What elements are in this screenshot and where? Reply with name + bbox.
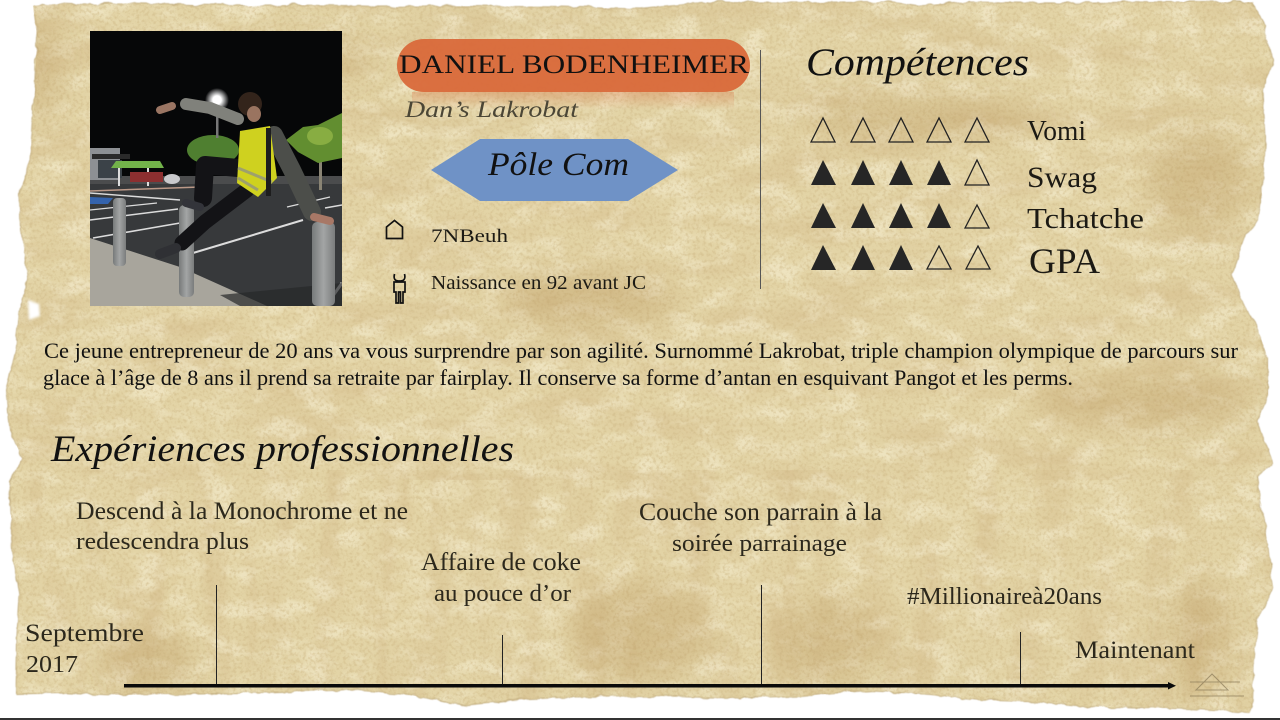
timeline start label: Septembre — [25, 620, 144, 647]
skill rating: Tchatche: Tchatche — [1027, 204, 1144, 235]
timeline start label — [25, 620, 144, 678]
timeline event: Monochrome: Descend à la Monochrome et ne — [76, 498, 408, 525]
icon: person — [394, 274, 405, 303]
bollards — [113, 198, 126, 266]
department badge: Pôle Com — [487, 147, 629, 183]
name badge: DANIEL BODENHEIMER — [399, 50, 750, 79]
icon: house — [386, 220, 402, 238]
heading: skills: Compétences — [806, 41, 1029, 84]
arrow — [124, 682, 1176, 690]
timeline event: Affaire de coke: Affaire de coke — [421, 549, 581, 576]
biography paragraph: Ce jeune entrepreneur de 20 ans va vous surprendre par son agilité. Surnommé Lakrobat, triple champion olympique de parcours sur — [44, 338, 1239, 363]
timeline — [124, 585, 1176, 690]
timeline event: Monochrome: redescendra plus — [76, 529, 249, 555]
birth date: Naissance en 92 avant JC — [431, 272, 646, 294]
ink doodle bottom right — [1190, 674, 1244, 696]
location: 7NBeuh — [431, 226, 509, 247]
biography paragraph: glace à l’âge de 8 ans il prend sa retraite par fairplay. Il conserve sa forme d’antan en esquivant Pangot et les perms. — [43, 365, 1073, 390]
timeline event: parrainage: soirée parrainage — [672, 531, 847, 557]
biography paragraph — [43, 338, 1239, 390]
shelter — [111, 161, 180, 186]
background building — [90, 148, 120, 180]
timeline start label: 2017 — [26, 652, 78, 678]
skill rating: Tchatche — [811, 203, 1144, 235]
photo: man leaping over bollards at night — [90, 31, 342, 306]
timeline event: parrainage: Couche son parrain à la — [639, 499, 882, 526]
timeline event: Affaire de coke — [421, 549, 581, 607]
heading: professional experience: Expériences professionnelles — [50, 429, 514, 470]
lamp — [205, 88, 229, 138]
timeline event: parrainage — [639, 499, 882, 557]
name badge — [397, 39, 750, 110]
skill rating: GPA — [811, 241, 1100, 281]
nickname: Dan’s Lakrobat — [404, 97, 579, 122]
timeline event: Affaire de coke: au pouce d’or — [434, 581, 571, 607]
timeline event: millionaire: #Millionaireà20ans — [907, 584, 1102, 610]
department badge — [431, 139, 678, 201]
skill rating: Vomi — [811, 116, 1086, 147]
white tear on left edge — [28, 300, 40, 320]
bottom slide edge — [0, 718, 1280, 720]
skill rating: Swag: Swag — [1027, 161, 1097, 194]
skill rating: Vomi: Vomi — [1027, 116, 1086, 147]
skill rating: Swag — [811, 160, 1097, 194]
skill rating: GPA: GPA — [1029, 241, 1100, 281]
timeline end label: Maintenant — [1075, 637, 1195, 664]
ground — [90, 176, 342, 306]
person — [160, 104, 330, 254]
vertical divider — [760, 50, 761, 289]
trees — [187, 113, 342, 190]
timeline event: Monochrome — [76, 498, 408, 555]
